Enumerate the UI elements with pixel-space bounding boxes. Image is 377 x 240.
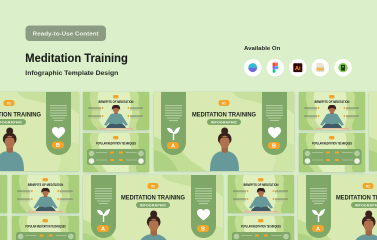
slide: benefits, row 1 bbox=[83, 92, 149, 131]
slide: meditation cover, row 1 centre bbox=[154, 92, 294, 171]
slide: meditation cover, row 2 centre: 01 bbox=[151, 185, 155, 189]
ready-to-use badge: Ready-to-Use Content bbox=[33, 31, 99, 37]
slide: techniques, row 1 bbox=[83, 133, 149, 172]
slide: meditation cover, row 1 left bbox=[0, 92, 79, 171]
available on heading: Available On bbox=[244, 46, 280, 52]
slide: benefits, row 2 left: BENEFITS OF MEDITATION bbox=[28, 183, 64, 187]
slide: meditation cover, row 1 centre: B bbox=[272, 144, 276, 150]
slide: benefits, row 2 left bbox=[12, 175, 79, 214]
slide: benefits, row 2 right bbox=[228, 175, 294, 214]
slide: meditation cover, row 2 centre: MEDITATION TRAINING bbox=[121, 194, 185, 202]
slide: meditation cover, row 1 centre: 01 bbox=[222, 102, 226, 106]
slide: meditation cover, row 1 centre: INFOGRAPHIC bbox=[211, 120, 238, 124]
slide: meditation cover, row 2 right: 01 bbox=[366, 185, 370, 189]
slide: partial, right edge row 1 bbox=[369, 92, 377, 171]
icon: figma bbox=[267, 59, 284, 76]
slide: benefits, row 1 right bbox=[299, 92, 365, 131]
slide: meditation cover, row 2 centre bbox=[83, 175, 223, 240]
slide: meditation cover, row 2 centre: A bbox=[101, 227, 105, 233]
slide: techniques, row 2 right bbox=[228, 216, 294, 240]
slide: benefits, row 1: BENEFITS OF MEDITATION bbox=[98, 100, 134, 104]
icon: green app bbox=[334, 59, 352, 76]
slide: techniques, row 2 left bbox=[12, 216, 79, 240]
icon: illustrator: Ai bbox=[295, 66, 301, 72]
slide: meditation cover, row 2 centre: B bbox=[201, 227, 205, 233]
slide: meditation cover, row 1 left: 01 bbox=[7, 102, 11, 106]
slide: meditation cover, row 2 right bbox=[298, 175, 377, 240]
ready-to-use badge bbox=[26, 26, 106, 41]
slide: meditation cover, row 2 centre: INFOGRAPHIC bbox=[140, 204, 167, 208]
slide: meditation cover, row 1 left: B bbox=[56, 143, 60, 149]
slide: meditation cover, row 1 centre: MEDITATION TRAINING bbox=[192, 112, 256, 118]
slide: techniques, row 1 right bbox=[299, 133, 365, 172]
slide: meditation cover, row 2 right: A bbox=[316, 227, 320, 233]
app icons row bbox=[244, 59, 352, 76]
subtitle: Infographic Template Design bbox=[25, 70, 118, 77]
slide: partial techniques, left edge row 2 bbox=[0, 216, 7, 240]
slide: partial benefits, left edge row 2 bbox=[0, 175, 7, 214]
slide: benefits, row 1 right: BENEFITS OF MEDITATION bbox=[314, 100, 350, 104]
main title: Meditation Training bbox=[25, 53, 128, 65]
slide: benefits, row 2 right: BENEFITS OF MEDITATION bbox=[244, 183, 279, 187]
slide: meditation cover, row 1 centre: A bbox=[171, 144, 175, 150]
icon: canva bbox=[244, 59, 261, 76]
icon: file bbox=[312, 59, 329, 76]
slide group with soft focus bbox=[0, 92, 377, 240]
